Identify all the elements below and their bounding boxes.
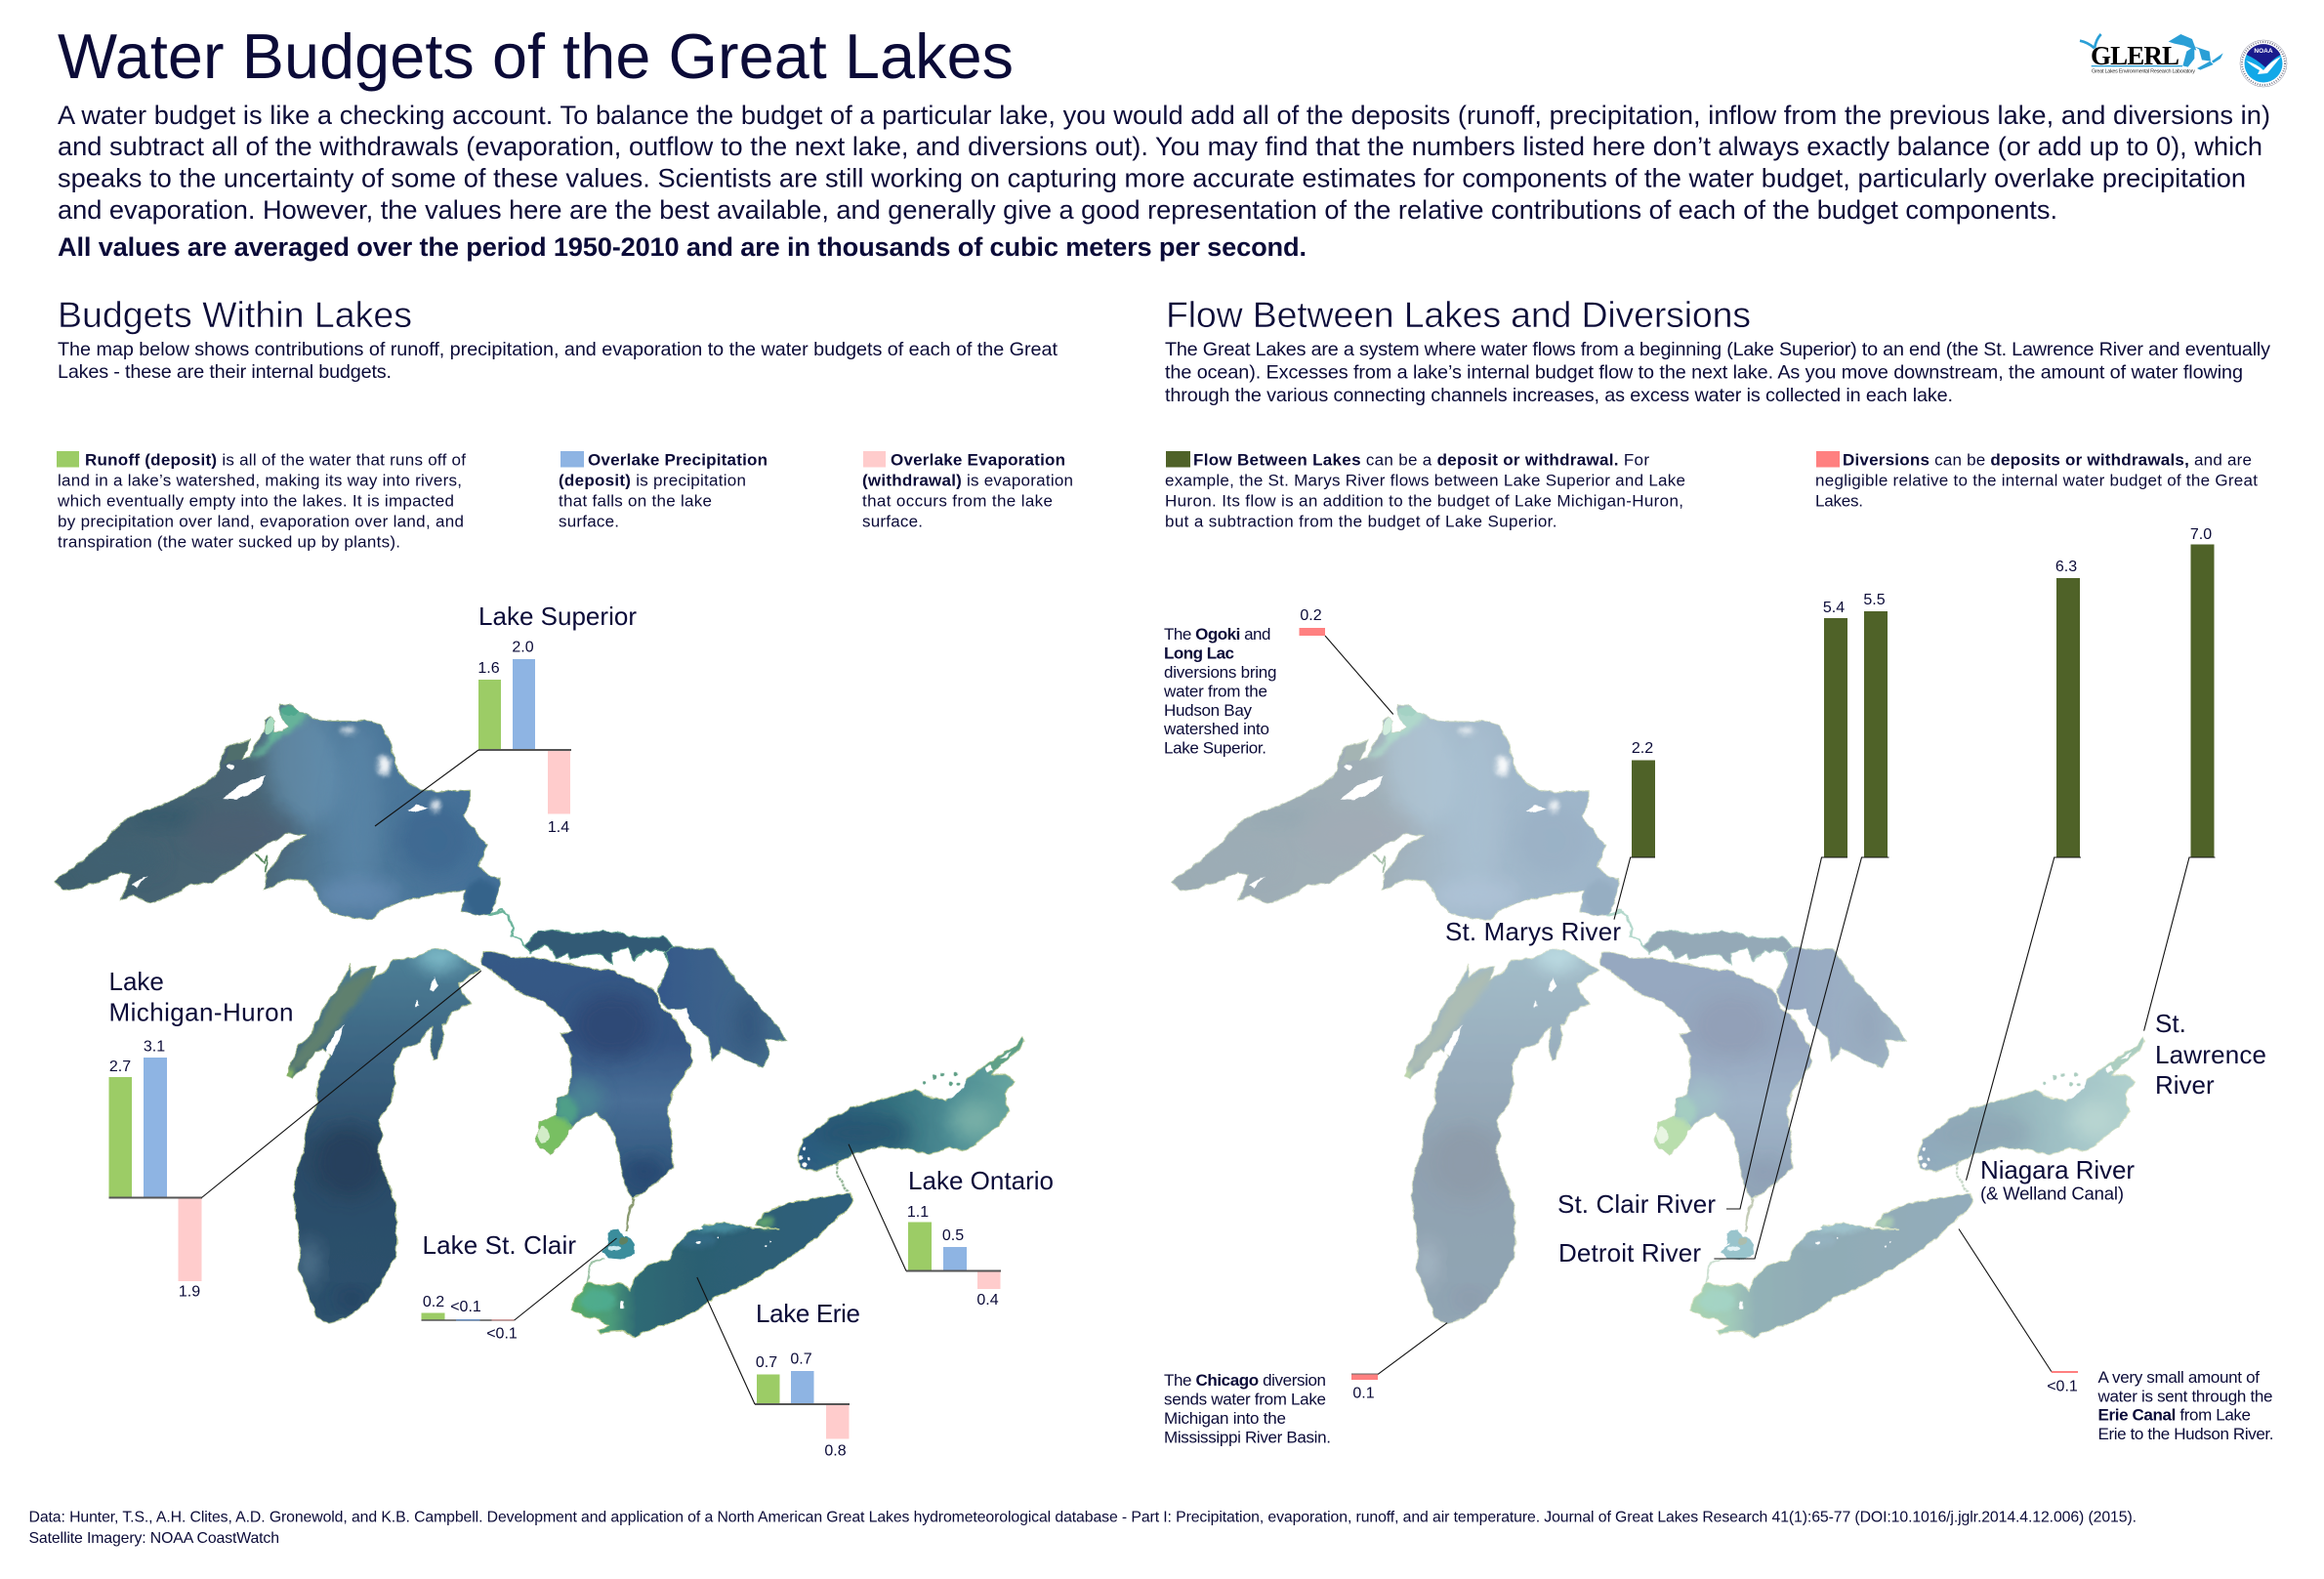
- chart: Lake Superior: 1.6: [477, 660, 500, 677]
- legend: diversions: Diversions can be deposits or withdrawals, and are: [1843, 451, 2252, 469]
- gaps, Lake Michigan: [325, 976, 437, 1056]
- chart: Lake Michigan-Huron: Lake: [109, 967, 164, 996]
- chart: Lake Michigan-Huron: 3.1: [144, 1039, 165, 1055]
- description: flow between lakes: through the various connecting channels increases, as excess water is collected in each lake.: [1165, 385, 1953, 406]
- flow bar: Detroit River 5.5: Detroit River: [1558, 1238, 1701, 1267]
- legend: runoff: by precipitation over land, evaporation over land, and: [58, 512, 464, 531]
- flow bar: Niagara River 6.3: [1967, 559, 2135, 1203]
- chart: Lake Superior: 1.4: [548, 819, 569, 836]
- description: flow between lakes: [1165, 339, 2270, 406]
- intro text: speaks to the uncertainty of some of these values. Scientists are still working on capturing more accurate estimates for components of the water budget, particularly overlake precipitation: [58, 162, 2246, 193]
- chart: Lake St. Clair: <0.1: [450, 1299, 481, 1315]
- legend: runoff: transpiration (the water sucked up by plants).: [58, 533, 400, 551]
- lake: Michigan: [285, 944, 480, 1324]
- chart: Lake St. Clair: <0.1: [486, 1326, 518, 1342]
- logo: GLERL: [2080, 34, 2223, 74]
- chart: Lake Ontario: 1.1: [907, 1204, 929, 1221]
- diversion: Erie Canal: Erie Canal from Lake: [2097, 1406, 2251, 1424]
- description: budgets within lakes: [58, 339, 1058, 383]
- chart: Lake Superior: Lake Superior: [478, 602, 637, 631]
- diversion: Chicago: sends water from Lake: [1164, 1391, 1326, 1408]
- diversion: Chicago: The Chicago diversion: [1164, 1371, 1326, 1390]
- legend: overlake evaporation: (withdrawal) is evaporation: [862, 471, 1073, 490]
- lake: St. Clair: [588, 1199, 634, 1282]
- diversion: Erie Canal: water is sent through the: [2097, 1387, 2273, 1406]
- chart: Lake Erie: Lake Erie: [756, 1299, 860, 1328]
- legend: overlake precipitation: Overlake Precipitation: [588, 451, 768, 469]
- diversion: Ogoki and Long Lac: 0.2: [1300, 607, 1322, 624]
- diversion: Erie Canal: <0.1: [2047, 1379, 2078, 1394]
- intro text: and evaporation. However, the values here are the best available, and generally give a good representation of the relative contributions of each of the budget components.: [58, 194, 2057, 225]
- flow bar: St. Lawrence River 7.0: River: [2155, 1070, 2215, 1100]
- flow bar: Niagara River 6.3: 6.3: [2055, 559, 2077, 575]
- flow bar: St. Clair River 5.4: [1557, 600, 1847, 1219]
- legend: flow between lakes: example, the St. Marys River flows between Lake Superior and Lake: [1165, 471, 1685, 490]
- diversion: Ogoki and Long Lac: The Ogoki and: [1164, 625, 1271, 644]
- legend: overlake precipitation: that falls on the lake: [559, 492, 712, 510]
- intro text: A water budget is like a checking account. To balance the budget of a particular lake, you would add all of the deposits (runoff, precipitation, inflow from the previous lake, and diversions in): [58, 100, 2270, 130]
- lake: Erie: [571, 1193, 852, 1337]
- diversion: Chicago: Michigan into the: [1164, 1409, 1286, 1428]
- chart: Lake St. Clair: 0.2: [423, 1294, 444, 1310]
- intro text: All values are averaged over the period 1950-2010 and are in thousands of cubic meters per second.: [58, 231, 1307, 262]
- chart: Lake St. Clair: [422, 1230, 617, 1342]
- faded satellite map of the lakes: [1171, 697, 2146, 1337]
- diversion: Chicago: 0.1: [1352, 1385, 1375, 1402]
- legend: runoff: [57, 451, 466, 551]
- flow bar: St. Marys River 2.2: [1445, 740, 1655, 946]
- panel: budgets within lakes: [54, 294, 1073, 1459]
- description: flow between lakes: the ocean). Excesses from a lake’s internal budget flow to the next lake. As you move downstream, the amount of water flowing: [1165, 361, 2243, 383]
- legend: runoff: Runoff (deposit) is all of the water that runs off of: [85, 451, 466, 469]
- chart: Lake Erie: 0.8: [824, 1443, 847, 1459]
- legend: overlake precipitation: [559, 451, 768, 531]
- legend: overlake evaporation: surface.: [862, 512, 923, 531]
- flow bar: St. Marys River 2.2: St. Marys River: [1445, 917, 1621, 946]
- flow bar: St. Lawrence River 7.0: 7.0: [2190, 526, 2212, 543]
- description: flow between lakes: The Great Lakes are a system where water flows from a beginning (Lake Superior) to an end (the St. Lawrence River and eventually: [1165, 339, 2270, 360]
- description: budgets within lakes: The map below shows contributions of runoff, precipitation, and evaporation to the water budgets of each of the Great: [58, 339, 1058, 360]
- diversion: Ogoki and Long Lac: water from the: [1163, 682, 1267, 701]
- intro text: and subtract all of the withdrawals (evaporation, outflow to the next lake, and diversions out). You may find that the numbers listed here don’t always exactly balance (or add up to 0), which: [58, 131, 2262, 161]
- legend: flow between lakes: [1165, 451, 1685, 531]
- legend: diversions: [1815, 451, 2258, 510]
- diversion: Erie Canal: A very small amount of: [2097, 1368, 2260, 1387]
- chart: Lake St. Clair: Lake St. Clair: [422, 1230, 576, 1260]
- chart: Lake Michigan-Huron: Michigan-Huron: [109, 998, 293, 1027]
- logo: NOAA: NOAA: [2254, 48, 2273, 55]
- diversion: Chicago: [1164, 1323, 1447, 1447]
- heading: budgets within lakes: Budgets Within Lakes: [58, 294, 412, 335]
- diversion: Chicago: Mississippi River Basin.: [1164, 1428, 1331, 1447]
- lake: Ontario: [798, 1037, 1025, 1191]
- diversion: Ogoki and Long Lac: Lake Superior.: [1164, 738, 1266, 758]
- chart: Lake Ontario: 0.5: [942, 1227, 964, 1244]
- description: budgets within lakes: Lakes - these are their internal budgets.: [58, 361, 392, 383]
- chart: Lake Michigan-Huron: [109, 967, 481, 1301]
- flow bar: Detroit River 5.5: [1558, 592, 1888, 1267]
- legend: diversions: negligible relative to the internal water budget of the Great: [1815, 471, 2258, 490]
- title: Water Budgets of the Great Lakes: [58, 21, 1014, 92]
- legend: overlake precipitation: surface.: [559, 512, 619, 531]
- chart: Lake Superior: [375, 602, 637, 836]
- logo: GLERL: Great Lakes Environmental Research Laboratory: [2092, 68, 2195, 74]
- lake: Huron and Georgian Bay: [481, 910, 788, 1199]
- footer: data sources: Data: Hunter, T.S., A.H. Clites, A.D. Gronewold, and K.B. Campbell. Development and application of a North American Great Lakes hydrometeorological database - Part I: Precipitation, evaporation, runoff, and air temperature. Journal of Great Lakes Research 41(1):65-77 (DOI:10.1016/j.jglr.2014.4.12.006) (2015).: [29, 1510, 2137, 1525]
- legend: overlake evaporation: Overlake Evaporation: [891, 451, 1065, 469]
- flow bar: Niagara River 6.3: Niagara River: [1980, 1155, 2135, 1184]
- chart: Lake Ontario: [849, 1144, 1054, 1309]
- panel: flow between lakes and diversions: [1163, 294, 2273, 1447]
- diversion: Ogoki and Long Lac: diversions bring: [1164, 663, 1277, 682]
- chart: Lake Erie: [697, 1277, 860, 1459]
- satellite map of the lakes: [54, 697, 1025, 1337]
- legend: runoff: which eventually empty into the lakes. It is impacted: [57, 492, 454, 510]
- diversion: Ogoki and Long Lac: Hudson Bay: [1164, 701, 1252, 720]
- flow bar: St. Marys River 2.2: 2.2: [1632, 740, 1653, 757]
- logos: GLERL and NOAA: [2080, 34, 2287, 87]
- chart: Lake Superior: 2.0: [512, 639, 534, 656]
- islands and gaps, Lake Superior: [133, 765, 429, 888]
- diversion: Ogoki and Long Lac: watershed into: [1163, 720, 1269, 738]
- chart: Lake Erie: 0.7: [756, 1354, 777, 1371]
- legend: overlake evaporation: that occurs from the lake: [862, 492, 1053, 510]
- diversion: Ogoki and Long Lac: Long Lac: [1164, 644, 1234, 662]
- legend: overlake evaporation: [862, 451, 1073, 531]
- chart: Lake Michigan-Huron: 1.9: [179, 1283, 200, 1301]
- diversion: Erie Canal: [1959, 1228, 2273, 1443]
- legend: diversions: Lakes.: [1815, 492, 1863, 510]
- legend: flow between lakes: Flow Between Lakes can be a deposit or withdrawal. For: [1193, 451, 1649, 469]
- logo: NOAA: [2240, 40, 2287, 87]
- chart: Lake Ontario: 0.4: [976, 1292, 999, 1309]
- flow bar: Niagara River 6.3: (& Welland Canal): [1980, 1184, 2124, 1203]
- footer: data sources: [29, 1510, 2137, 1547]
- chart: Lake Ontario: Lake Ontario: [908, 1166, 1054, 1195]
- St. Marys River: [488, 910, 530, 952]
- chart: Lake Erie: 0.7: [790, 1351, 812, 1367]
- chart: Lake Michigan-Huron: 2.7: [109, 1059, 131, 1075]
- North Channel: [525, 930, 674, 965]
- heading: flow between lakes: Flow Between Lakes and Diversions: [1166, 294, 1751, 335]
- diversion: Erie Canal: Erie to the Hudson River.: [2097, 1425, 2273, 1443]
- flow bar: St. Lawrence River 7.0: St.: [2155, 1009, 2186, 1038]
- flow bar: St. Lawrence River 7.0: Lawrence: [2155, 1040, 2266, 1069]
- legend: runoff: land in a lake’s watershed, making its way into rivers,: [58, 471, 462, 490]
- flow bar: St. Clair River 5.4: St. Clair River: [1557, 1189, 1716, 1219]
- logo: GLERL: GLERL: [2091, 41, 2179, 70]
- legend: flow between lakes: but a subtraction from the budget of Lake Superior.: [1165, 512, 1556, 531]
- intro text: [58, 100, 2270, 262]
- flow bar: St. Clair River 5.4: 5.4: [1823, 600, 1845, 616]
- flow bar: St. Lawrence River 7.0: [2144, 526, 2266, 1100]
- diversion: Ogoki and Long Lac: [1163, 607, 1393, 758]
- flow bar: Detroit River 5.5: 5.5: [1863, 592, 1886, 608]
- footer: data sources: Satellite Imagery: NOAA CoastWatch: [29, 1530, 279, 1547]
- legend: overlake precipitation: (deposit) is precipitation: [559, 471, 746, 490]
- lake: Superior: [54, 697, 505, 920]
- islands, Lake Ontario: [799, 1050, 1013, 1167]
- legend: flow between lakes: Huron. Its flow is an addition to the budget of Lake Michigan-Huron,: [1165, 492, 1683, 510]
